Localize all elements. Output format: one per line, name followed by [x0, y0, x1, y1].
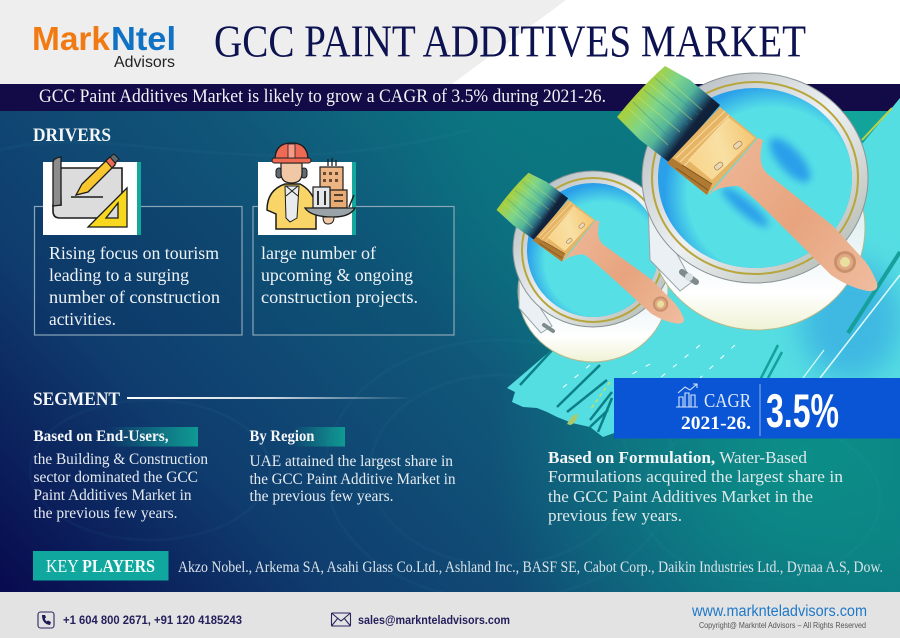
text block: end-users: the previous few years. [34, 505, 178, 522]
text block: region: the GCC Paint Additive Market in [250, 471, 456, 488]
panel: driver one: number of construction [49, 287, 220, 307]
text block: end-users: the Building & Construction [34, 451, 208, 468]
panel: driver two: large number of [261, 243, 376, 263]
panel: driver one: leading to a surging [49, 265, 189, 285]
panel: driver two: upcoming & ongoing [261, 265, 413, 285]
callout: CAGR: 2021-26. [681, 414, 751, 434]
icon: blueprint and pencil [43, 154, 141, 235]
phone numbers: +1 604 800 2671, +91 120 4185243 [63, 615, 242, 627]
text block: end-users: Based on End-Users, [34, 428, 169, 445]
email: sales@marknteladvisors.com [358, 615, 510, 627]
heading: segment: SEGMENT [33, 389, 120, 410]
panel: driver one [34, 206, 242, 335]
logo: Mark [32, 20, 111, 57]
text block: region: UAE attained the largest share in [250, 453, 453, 470]
text block: formulation: Formulations acquired the largest share in [548, 467, 843, 486]
icon: construction worker [258, 143, 356, 235]
subtitle band [0, 84, 900, 111]
text block: formulation: previous few years. [548, 506, 682, 525]
panel: driver one: activities. [49, 309, 116, 329]
title: GCC PAINT ADDITIVES MARKET [214, 16, 806, 66]
key players: KEY PLAYERS [46, 556, 155, 576]
copyright: Copyright@ Markntel Advisors – All Rights Reserved [699, 621, 866, 630]
text block: formulation: the GCC Paint Additives Market in the [548, 487, 813, 506]
paint splash [507, 98, 900, 437]
text block: region [249, 427, 456, 505]
large paint brush [617, 66, 877, 291]
callout: CAGR: CAGR [704, 390, 752, 412]
icon: mail [332, 613, 350, 626]
text block: formulation: Based on Formulation, Water-Based [548, 448, 808, 467]
text block: formulation [548, 448, 843, 525]
small paint brush [495, 166, 684, 332]
footer [0, 592, 900, 638]
callout: CAGR: 3.5% [766, 384, 839, 437]
header background [0, 0, 900, 84]
subtitle band: GCC Paint Additives Market is likely to grow a CAGR of 3.5% during 2021-26. [39, 86, 606, 107]
panel: driver two: construction projects. [261, 287, 418, 307]
text block: end-users: Paint Additives Market in [34, 487, 192, 504]
text block: end-users: sector dominated the GCC [34, 469, 198, 486]
callout: CAGR [614, 378, 900, 438]
heading: drivers: DRIVERS [33, 126, 111, 146]
logo: Ntel [111, 20, 176, 57]
logo: Advisors [114, 54, 175, 71]
small paint can [513, 171, 679, 362]
text block: end-users [33, 427, 208, 522]
logo [32, 20, 176, 71]
website: www.marknteladvisors.com [691, 603, 867, 620]
text block: region: By Region [250, 428, 315, 445]
large paint can [642, 73, 880, 330]
panel: driver two [253, 206, 454, 335]
key players [33, 551, 883, 580]
panel: driver one: Rising focus on tourism [49, 243, 219, 263]
icon: phone [38, 612, 54, 628]
text block: region: the previous few years. [250, 488, 394, 505]
